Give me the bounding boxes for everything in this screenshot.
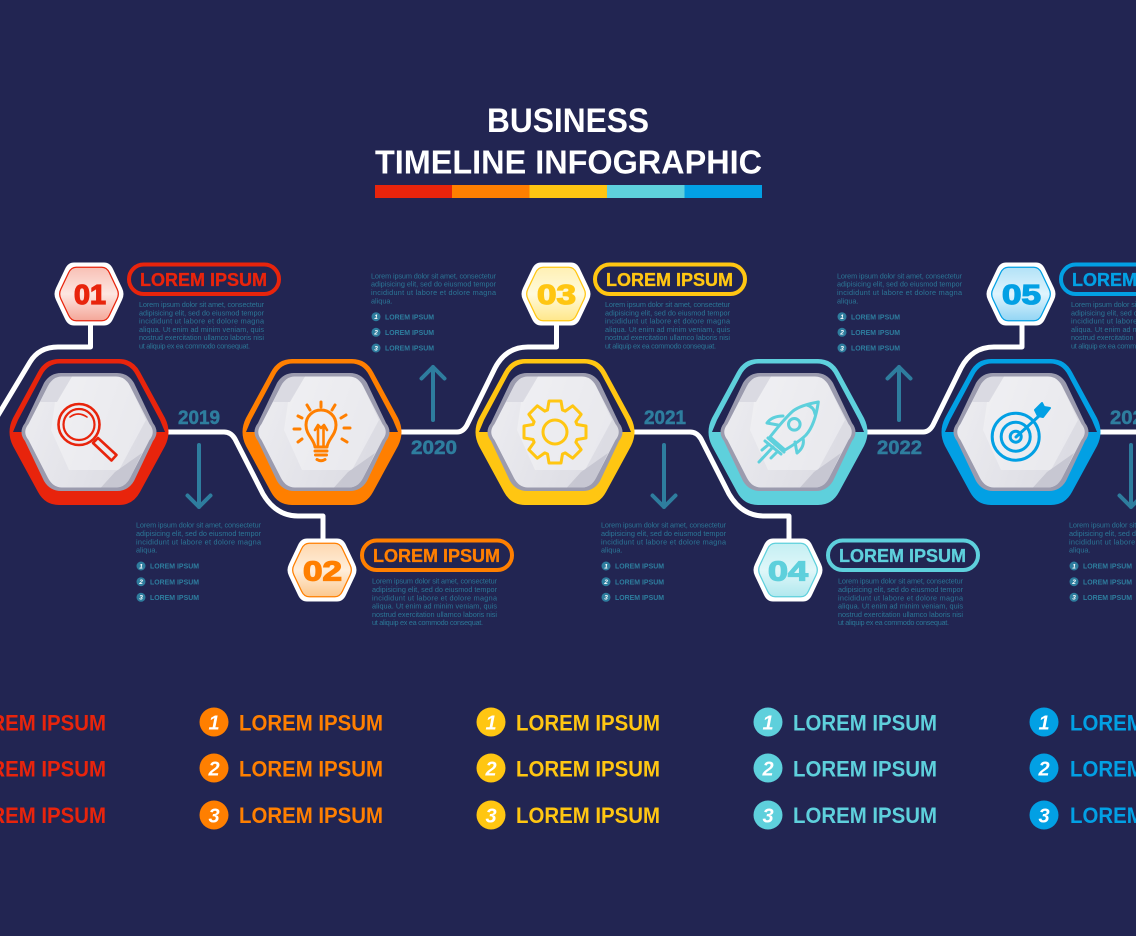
legend column yellow: 2 [484, 758, 497, 780]
arrow up 2020 [422, 367, 444, 420]
legend column red [0, 710, 106, 828]
legend column orange: LOREM IPSUM [239, 756, 383, 782]
pill label 05 [1061, 264, 1136, 294]
text block under label 04: ut aliquip ex ea commodo consequat. [838, 618, 949, 627]
legend column teal: LOREM IPSUM [793, 803, 937, 828]
text block under label 04: Lorem ipsum dolor sit amet, consectetur [838, 577, 964, 586]
badge: 03: 03 [537, 279, 576, 310]
timeline connector line [0, 325, 1136, 545]
note block 2021: incididunt ut labore et dolore magna [601, 537, 727, 546]
title [375, 102, 762, 180]
note block 2021 [601, 521, 727, 602]
note block 2023: LOREM IPSUM [1083, 577, 1132, 586]
note block 2021: 3 [604, 595, 608, 602]
text block under label 01 [139, 300, 265, 350]
note block 2022: LOREM IPSUM [851, 344, 900, 353]
text block under label 04: incididunt ut labore et dolore magna [838, 593, 964, 602]
pill label 02: LOREM IPSUM [373, 545, 500, 566]
year 2019: 2019 [178, 408, 220, 429]
note block 2019: incididunt ut labore et dolore magna [136, 537, 262, 546]
title: TIMELINE INFOGRAPHIC [375, 144, 762, 180]
text block under label 02: adipisicing elit, sed do eiusmod tempor [372, 585, 498, 594]
arrow down 2021 [652, 445, 676, 507]
note block 2023: 2 [1071, 579, 1076, 586]
note block 2023: LOREM IPSUM [1083, 593, 1132, 602]
note block 2019: adipisicing elit, sed do eiusmod tempor [136, 529, 262, 538]
note block 2023: 3 [1072, 595, 1076, 602]
text block under label 03 [605, 300, 731, 350]
legend column blue: 1 [1038, 712, 1050, 734]
panel: hexagon 4 rocket [708, 359, 868, 505]
pill label 02 [362, 540, 512, 570]
note block 2020: incididunt ut labore et dolore magna [371, 288, 497, 297]
pill label 01 [129, 264, 279, 294]
badge: 01: 01 [74, 279, 106, 310]
legend column yellow: LOREM IPSUM [516, 756, 660, 782]
text block under label 03: incididunt ut labore et dolore magna [605, 317, 731, 326]
text block under label 04: nostrud exercitation ullamco laboris nisi [838, 610, 963, 619]
note block 2022: LOREM IPSUM [851, 312, 900, 321]
badge: 04 [754, 538, 822, 602]
note block 2021: 1 [604, 563, 608, 570]
arrow down 2023 [1120, 445, 1136, 507]
note block 2020: adipisicing elit, sed do eiusmod tempor [371, 280, 497, 289]
legend column teal: 2 [761, 758, 774, 780]
text block under label 02: nostrud exercitation ullamco laboris nisi [372, 610, 497, 619]
note block 2022: incididunt ut labore et dolore magna [837, 288, 963, 297]
badge: 05 [986, 262, 1056, 326]
legend column yellow: LOREM IPSUM [516, 710, 660, 736]
note block 2022: Lorem ipsum dolor sit amet, consectetur [837, 271, 963, 280]
text block under label 04: adipisicing elit, sed do eiusmod tempor [838, 585, 964, 594]
note block 2022: aliqua. [837, 296, 859, 305]
pill label 04 [828, 540, 978, 570]
note block 2020: Lorem ipsum dolor sit amet, consectetur [371, 271, 497, 280]
panel: hexagon 3 gear [476, 359, 634, 505]
text block under label 03: Lorem ipsum dolor sit amet, consectetur [605, 300, 731, 309]
text block under label 05 [1071, 300, 1136, 350]
badge: 04: 04 [768, 556, 809, 586]
text block under label 02 [372, 577, 498, 627]
text block under label 01: aliqua. Ut enim ad minim veniam, quis [139, 325, 264, 334]
icon: light bulb [294, 402, 350, 461]
note block 2022: adipisicing elit, sed do eiusmod tempor [837, 280, 963, 289]
note block 2022: LOREM IPSUM [851, 328, 900, 337]
note block 2020 [371, 271, 497, 353]
pill label 04: LOREM IPSUM [839, 545, 966, 566]
note block 2020: 3 [374, 345, 378, 352]
note block 2019: 1 [139, 563, 143, 570]
text block under label 02: Lorem ipsum dolor sit amet, consectetur [372, 577, 498, 586]
arrow up 2022 [888, 367, 910, 420]
text block under label 01: incididunt ut labore et dolore magna [139, 317, 265, 326]
text block under label 02: incididunt ut labore et dolore magna [372, 593, 498, 602]
note block 2021: aliqua. [601, 546, 623, 555]
pill label 03 [595, 264, 745, 294]
note block 2019: LOREM IPSUM [150, 593, 199, 602]
icon: magnifying glass [58, 404, 116, 460]
legend column yellow: LOREM IPSUM [516, 803, 660, 828]
pill label 01: LOREM IPSUM [140, 269, 267, 290]
note block 2021: adipisicing elit, sed do eiusmod tempor [601, 529, 727, 538]
note block 2020: 1 [374, 314, 378, 321]
note block 2023: 1 [1072, 563, 1076, 570]
note block 2020: LOREM IPSUM [385, 328, 434, 337]
legend column orange: 3 [208, 806, 220, 828]
legend column yellow: 1 [485, 712, 497, 734]
note block 2020: 2 [373, 330, 378, 337]
legend column orange [200, 708, 383, 830]
badge: 05: 05 [1002, 279, 1041, 310]
badge: 02 [288, 538, 356, 602]
note block 2020: LOREM IPSUM [385, 312, 434, 321]
note block 2019: 2 [138, 579, 143, 586]
legend column orange: LOREM IPSUM [239, 710, 383, 736]
text block under label 03: ut aliquip ex ea commodo consequat. [605, 342, 716, 350]
note block 2021: LOREM IPSUM [615, 562, 664, 571]
pill label 03: LOREM IPSUM [606, 269, 733, 290]
note block 2022: 3 [840, 345, 844, 352]
year 2021: 2021 [644, 408, 686, 429]
legend column orange: 1 [208, 712, 220, 734]
note block 2022: 2 [839, 330, 844, 337]
legend column teal [754, 708, 937, 830]
panel: hexagon 2 light bulb [242, 359, 402, 505]
note block 2020: LOREM IPSUM [385, 344, 434, 353]
note block 2019: Lorem ipsum dolor sit amet, consectetur [136, 521, 262, 530]
icon: target with arrow [992, 403, 1050, 460]
text block under label 03: aliqua. Ut enim ad minim veniam, quis [605, 325, 730, 334]
title: BUSINESS [487, 102, 649, 140]
note block 2020: aliqua. [371, 296, 393, 305]
legend column blue: 3 [1038, 806, 1050, 828]
icon: gear [524, 401, 586, 463]
panel: hexagon 5 target [942, 359, 1100, 505]
text block under label 03: nostrud exercitation ullamco laboris nisi [605, 333, 730, 342]
legend column teal: LOREM IPSUM [793, 756, 937, 782]
note block 2019: LOREM IPSUM [150, 562, 199, 571]
legend column teal: 3 [762, 806, 774, 828]
legend column orange: 2 [207, 758, 220, 780]
note block 2021: LOREM IPSUM [615, 593, 664, 602]
panel: hexagon 1 magnifier [10, 359, 168, 505]
text block under label 01: adipisicing elit, sed do eiusmod tempor [139, 308, 265, 317]
legend column yellow [476, 708, 660, 830]
note block 2021: 2 [603, 579, 608, 586]
icon: rocket [759, 402, 818, 462]
text block under label 04: aliqua. Ut enim ad minim veniam, quis [838, 602, 963, 611]
badge: 02: 02 [303, 556, 342, 586]
note block 2023: LOREM IPSUM [1083, 562, 1132, 571]
text block under label 02: aliqua. Ut enim ad minim veniam, quis [372, 602, 497, 611]
text block under label 01: nostrud exercitation ullamco laboris nisi [139, 333, 264, 342]
note block 2019: aliqua. [136, 546, 158, 555]
badge: 03 [522, 262, 590, 326]
arrow down 2019 [188, 445, 210, 507]
text block under label 01: ut aliquip ex ea commodo consequat. [139, 342, 250, 350]
year 2022: 2022 [877, 438, 922, 459]
note block 2023 [1069, 521, 1136, 602]
note block 2022: 1 [840, 314, 844, 321]
note block 2023: aliqua. [1069, 546, 1091, 555]
text block under label 01: Lorem ipsum dolor sit amet, consectetur [139, 300, 265, 309]
note block 2021: Lorem ipsum dolor sit amet, consectetur [601, 521, 727, 530]
badge: 01 [54, 262, 124, 326]
note block 2022 [837, 271, 963, 353]
text block under label 03: adipisicing elit, sed do eiusmod tempor [605, 308, 731, 317]
legend column orange: LOREM IPSUM [239, 803, 383, 828]
legend column teal: 1 [762, 712, 774, 734]
title colour bar [375, 185, 762, 198]
text block under label 04 [838, 577, 964, 627]
legend column teal: LOREM IPSUM [793, 710, 937, 736]
note block 2021: LOREM IPSUM [615, 577, 664, 586]
legend column blue [1030, 708, 1136, 830]
note block 2019: LOREM IPSUM [150, 577, 199, 586]
text block under label 02: ut aliquip ex ea commodo consequat. [372, 618, 483, 627]
legend column blue: 2 [1037, 758, 1050, 780]
note block 2019 [136, 521, 262, 602]
year 2020: 2020 [411, 438, 457, 459]
legend column yellow: 3 [485, 806, 497, 828]
note block 2019: 3 [139, 595, 143, 602]
